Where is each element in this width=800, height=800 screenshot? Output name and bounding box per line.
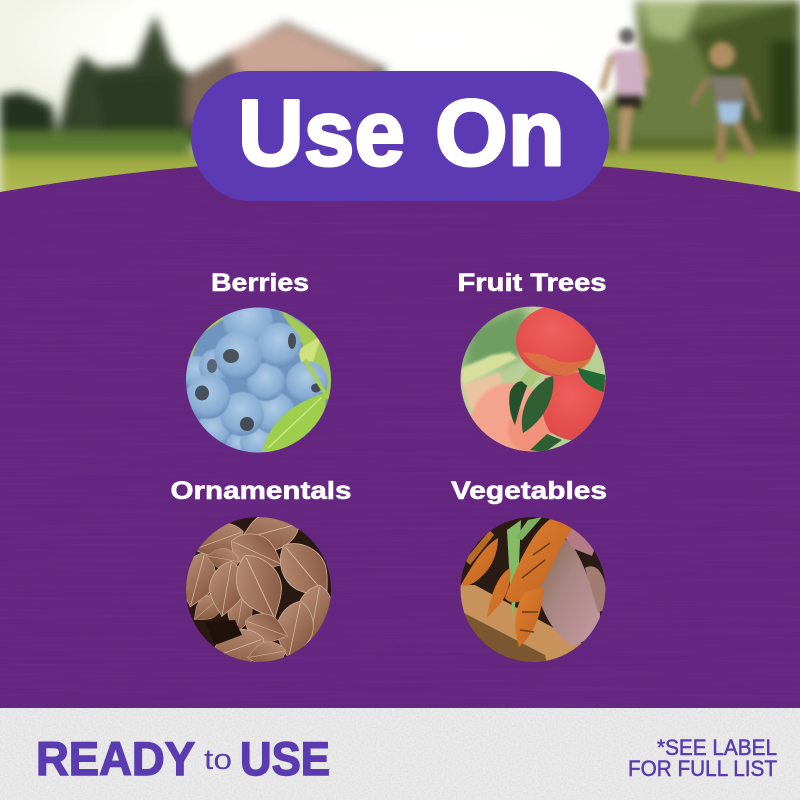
label: Berries: Berries <box>211 269 309 297</box>
background photo: backyard with running children <box>0 0 800 210</box>
label: Fruit Trees: Fruit Trees <box>458 269 606 297</box>
footer: Ready to Use wordmark: READY <box>36 732 195 785</box>
footnote: see label <box>628 735 777 781</box>
category: Ornamentals <box>170 477 352 676</box>
category: Berries <box>186 272 331 452</box>
photo: bronze leaves <box>186 517 331 662</box>
label: Vegetables: Vegetables <box>451 477 607 505</box>
title text <box>238 80 565 185</box>
purple textured panel <box>0 166 800 218</box>
photo: carrots and sweet potatoes <box>460 517 606 662</box>
footnote: see label: FOR FULL LIST <box>628 756 777 781</box>
title pill <box>191 71 609 201</box>
footer: textured wall band <box>0 708 800 800</box>
label: Ornamentals: Ornamentals <box>170 477 352 505</box>
footer: Ready to Use wordmark: to <box>204 744 232 776</box>
footnote: see label: *SEE LABEL <box>657 735 777 760</box>
photo: blueberries <box>186 308 331 452</box>
category: Vegetables <box>450 480 606 662</box>
footer: Ready to Use wordmark <box>36 732 330 785</box>
footer: Ready to Use wordmark: USE <box>240 732 330 785</box>
category: Fruit Trees <box>458 269 606 463</box>
child left <box>602 28 648 152</box>
title text: On <box>435 80 565 185</box>
photo: peaches <box>460 306 606 463</box>
title text: Use <box>238 80 405 185</box>
child right <box>692 42 758 162</box>
